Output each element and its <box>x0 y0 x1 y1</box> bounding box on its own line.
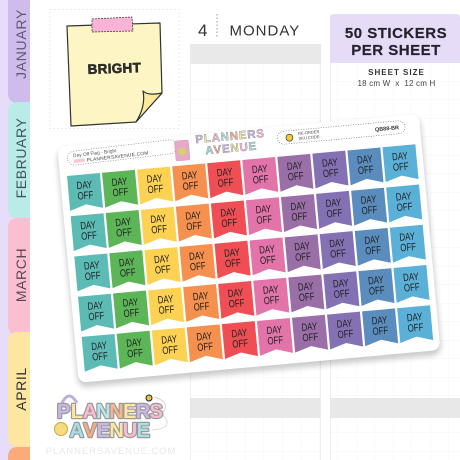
rainbow <box>62 396 77 403</box>
sheet title pill: Day Off Flag - Bright <box>73 148 117 159</box>
logo AVENUE: A <box>69 420 84 442</box>
column 10 sky: OFF <box>400 241 417 254</box>
column 7 mauve <box>277 154 328 353</box>
logo PLANNERS: A <box>83 401 97 423</box>
tab: March <box>8 218 30 335</box>
column 7 mauve: OFF <box>295 250 312 263</box>
column 2 green: OFF <box>116 226 133 239</box>
column 5 red: DAY <box>216 166 233 179</box>
column 5 red: OFF <box>232 337 249 350</box>
column 7 mauve: DAY <box>290 200 307 212</box>
sun <box>54 422 68 436</box>
sheet logo: AVENUE <box>205 141 258 157</box>
reorder pill: RE-ORDER <box>298 129 320 136</box>
column 2 green: DAY <box>122 296 139 309</box>
column 2 green: OFF <box>119 266 136 279</box>
reorder pill: QB88-BR <box>375 125 399 133</box>
logo PLANNERS <box>57 401 163 423</box>
logo PLANNERS: E <box>123 401 136 423</box>
column 4 orange: DAY <box>189 250 205 262</box>
column 7 mauve: OFF <box>298 291 315 303</box>
washi tape <box>92 17 133 32</box>
sheet body <box>57 114 440 383</box>
tab: February <box>8 102 30 218</box>
tab: February: FEBRUARY <box>13 118 29 198</box>
column 5 red: DAY <box>220 206 237 219</box>
column 6 pink <box>242 157 293 356</box>
column 9 blue: DAY <box>371 314 388 327</box>
column 9 blue <box>347 147 398 346</box>
column 9 blue: OFF <box>368 284 385 297</box>
column 8 purple: OFF <box>337 328 354 340</box>
column 7 mauve: OFF <box>302 331 319 344</box>
column 7 mauve: DAY <box>301 321 318 333</box>
column 9 blue: DAY <box>357 153 373 166</box>
logo PLANNERS: L <box>71 401 83 423</box>
column 8 purple <box>312 151 363 349</box>
brand logo <box>54 395 167 442</box>
column 3 yellow: OFF <box>151 223 168 236</box>
column 10 sky: OFF <box>396 201 413 213</box>
column 8 purple: DAY <box>332 277 349 290</box>
column 3 yellow <box>137 167 188 365</box>
column 10 sky: DAY <box>399 230 415 243</box>
column 3 yellow: OFF <box>162 344 179 356</box>
gray bands lower <box>190 398 460 418</box>
column 5 red: OFF <box>228 297 245 310</box>
column 10 sky: OFF <box>407 321 424 334</box>
column 4 orange: DAY <box>181 169 198 182</box>
column 4 orange: DAY <box>192 290 209 303</box>
column 1 teal: DAY <box>91 340 107 352</box>
logo PLANNERS: N <box>96 401 111 423</box>
column 4 orange: OFF <box>193 300 210 313</box>
column 3 yellow: DAY <box>150 213 166 225</box>
reorder pill <box>277 120 406 145</box>
column 4 orange <box>172 163 223 362</box>
bee <box>146 395 152 401</box>
logo PLANNERS: S <box>150 401 163 423</box>
column 4 orange: DAY <box>196 330 212 343</box>
column 4 orange: OFF <box>186 220 203 233</box>
column 1 teal: OFF <box>81 229 98 242</box>
column 3 yellow: DAY <box>161 333 177 346</box>
sheet size: 18 cm W x 12 cm H <box>357 79 436 88</box>
column 1 teal: DAY <box>87 299 104 312</box>
column 10 sky: OFF <box>392 160 409 173</box>
column 4 orange: OFF <box>197 341 214 353</box>
column 9 blue: DAY <box>368 274 384 287</box>
tab: January: JANUARY <box>13 9 29 79</box>
logo AVENUE: N <box>109 420 124 442</box>
column 9 blue: OFF <box>357 164 374 176</box>
column 8 purple: DAY <box>322 156 338 169</box>
gray day header <box>190 44 321 64</box>
column 7 mauve: OFF <box>291 210 308 223</box>
sheet shadow <box>57 117 442 388</box>
column 1 teal <box>67 173 118 372</box>
dotted note frame <box>50 10 179 128</box>
sticker count callout: PER SHEET <box>351 42 441 59</box>
column 1 teal: DAY <box>80 219 96 232</box>
column 4 orange: OFF <box>189 260 206 273</box>
logo AVENUE: E <box>97 420 110 442</box>
column 10 sky <box>382 144 433 343</box>
column 3 yellow: OFF <box>147 183 164 195</box>
column 5 red: OFF <box>225 257 242 270</box>
column 3 yellow: DAY <box>146 172 163 185</box>
column 9 blue: OFF <box>372 325 389 337</box>
column 5 red: DAY <box>224 246 240 259</box>
planner grid <box>190 44 460 460</box>
column 7 mauve: DAY <box>297 280 314 293</box>
tab: April <box>8 332 30 447</box>
column 1 teal: OFF <box>88 310 105 323</box>
column 7 mauve: DAY <box>286 160 303 172</box>
column 6 pink: OFF <box>252 173 269 186</box>
column 2 green: DAY <box>118 256 135 269</box>
column 1 teal: OFF <box>92 350 109 363</box>
logo PLANNERS: N <box>109 401 124 423</box>
column 3 yellow: OFF <box>158 303 175 316</box>
column 5 red: OFF <box>221 217 238 229</box>
column 6 pink: DAY <box>255 203 272 216</box>
sheet size: SHEET SIZE <box>368 68 425 77</box>
logo AVENUE: E <box>137 420 150 442</box>
sheet title pill: PLANNERSAVENUE.COM <box>86 150 149 164</box>
swirl line <box>152 397 167 430</box>
column 6 pink: OFF <box>256 213 273 226</box>
date heading: 4 <box>198 21 207 40</box>
tab: May (partial) <box>8 447 30 460</box>
date heading: MONDAY <box>230 22 300 40</box>
column 8 purple: DAY <box>329 237 345 250</box>
column 1 teal: OFF <box>84 270 101 282</box>
sticker sheet <box>56 114 442 388</box>
logo PLANNERS: R <box>136 401 151 423</box>
column 7 mauve: OFF <box>287 170 304 183</box>
column 3 yellow: OFF <box>154 263 171 276</box>
column 6 pink: OFF <box>260 254 277 266</box>
logo AVENUE: V <box>83 420 97 442</box>
column 8 purple: OFF <box>322 167 339 180</box>
column 2 green <box>102 170 153 369</box>
column 2 green: DAY <box>126 336 142 349</box>
column 10 sky: DAY <box>392 150 408 163</box>
column 6 pink: DAY <box>251 163 268 175</box>
column 8 purple: OFF <box>333 288 350 300</box>
logo PLANNERS: P <box>57 401 70 423</box>
column 2 green: DAY <box>115 216 131 228</box>
column 8 purple: DAY <box>336 317 353 330</box>
column 5 red: DAY <box>227 287 244 299</box>
column 2 green: DAY <box>111 176 128 188</box>
tab: January <box>8 0 30 103</box>
column 9 blue: OFF <box>361 204 378 217</box>
column 6 pink: OFF <box>267 334 284 347</box>
tab: April: APRIL <box>13 367 29 411</box>
column 5 red <box>207 160 258 359</box>
column 6 pink: DAY <box>266 324 283 336</box>
sheet logo <box>174 128 267 161</box>
website: PLANNERSAVENUE.COM <box>46 446 176 457</box>
column 3 yellow: DAY <box>154 253 170 265</box>
column 6 pink: OFF <box>263 294 280 307</box>
column 6 pink: DAY <box>259 243 275 256</box>
left tab spine <box>0 0 30 460</box>
column 5 red: DAY <box>231 327 248 340</box>
sticker count callout <box>330 14 460 63</box>
column 5 red: OFF <box>217 176 234 189</box>
column 8 purple: OFF <box>330 247 347 260</box>
sticker count callout: 50 STICKERS <box>345 25 447 42</box>
flag grid <box>67 144 433 372</box>
column 9 blue: OFF <box>365 244 382 257</box>
column 6 pink: DAY <box>262 283 279 296</box>
column 9 blue: DAY <box>364 234 380 246</box>
column 8 purple: OFF <box>326 207 343 220</box>
column 1 teal: OFF <box>77 189 94 202</box>
tab: March: MARCH <box>13 248 29 302</box>
column 3 yellow: DAY <box>157 293 174 306</box>
column 1 teal: DAY <box>83 259 100 272</box>
sticky note: Bright <box>67 17 162 126</box>
column 1 teal: DAY <box>76 179 93 191</box>
column 10 sky: DAY <box>406 311 423 324</box>
column 8 purple: DAY <box>325 197 342 209</box>
column 4 orange: OFF <box>182 180 199 192</box>
column 7 mauve: DAY <box>294 240 310 253</box>
note label: BRIGHT <box>87 60 142 77</box>
column 2 green: OFF <box>123 307 140 319</box>
column 10 sky: DAY <box>395 190 412 203</box>
column 2 green: OFF <box>127 347 144 360</box>
reorder pill: SKU CODE: <box>298 134 321 141</box>
sheet title pill <box>67 139 177 166</box>
column 10 sky: OFF <box>403 281 420 294</box>
sheet size <box>357 68 436 88</box>
logo AVENUE <box>69 420 150 442</box>
column 9 blue: DAY <box>360 193 377 206</box>
date heading <box>198 14 300 40</box>
column 2 green: OFF <box>112 186 129 199</box>
sheet logo: PLANNERS <box>195 128 265 146</box>
column 4 orange: DAY <box>185 209 201 222</box>
logo AVENUE: U <box>123 420 137 442</box>
column 10 sky: DAY <box>403 271 419 283</box>
